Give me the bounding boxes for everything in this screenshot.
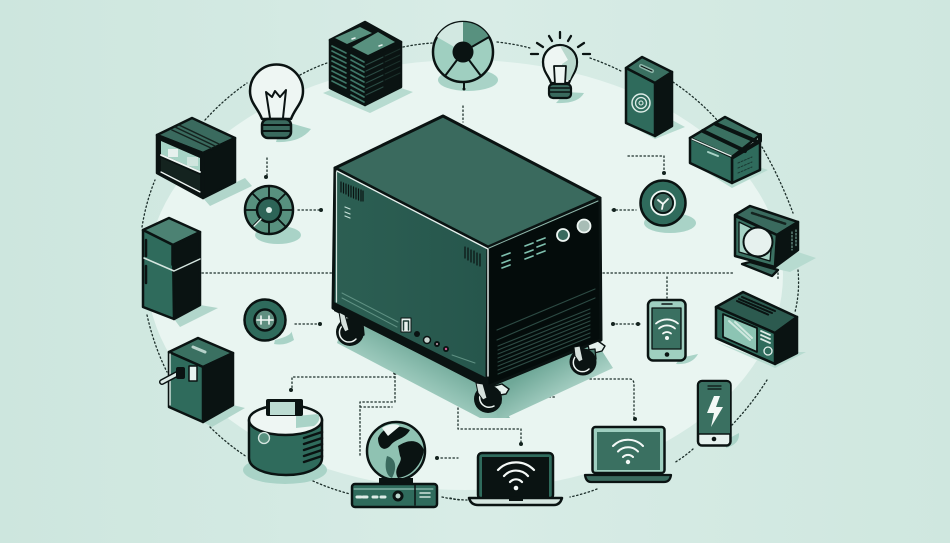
icon: box with plug xyxy=(162,338,245,427)
icon: flat box xyxy=(690,117,768,188)
front wheel xyxy=(474,383,509,413)
icon: cylinder device xyxy=(243,399,327,484)
dials xyxy=(557,220,590,241)
vents on left face xyxy=(341,182,480,266)
rear right wheel xyxy=(570,341,605,376)
icon: top disc xyxy=(433,22,498,91)
icon: refrigerator xyxy=(143,218,218,327)
left face xyxy=(333,168,488,387)
rear left wheel xyxy=(336,312,364,346)
right face grill xyxy=(497,289,595,374)
icon: tall box xyxy=(626,57,685,139)
bulb rays xyxy=(531,32,590,54)
dotted ring connecting the devices xyxy=(142,42,799,500)
icon: right light bulb with rays xyxy=(531,32,590,103)
lightning bolt xyxy=(707,396,723,427)
icon: globe on router xyxy=(352,422,437,507)
icon: black laptop with wifi xyxy=(469,453,562,505)
top face xyxy=(335,116,600,247)
icon: round switch button xyxy=(244,300,294,344)
dotted connector lines xyxy=(202,106,778,458)
icon: right dial xyxy=(640,180,696,233)
base strip xyxy=(334,302,487,388)
floor shadow left xyxy=(337,318,510,418)
small white dashes xyxy=(345,207,350,218)
icon: left wheel dial xyxy=(245,186,301,244)
floor shadow right xyxy=(487,340,613,418)
icon: monitor xyxy=(735,206,816,276)
icon: green laptop with wifi xyxy=(585,427,671,482)
central light ellipse xyxy=(147,60,783,490)
right face vents xyxy=(502,238,545,268)
icon: server stack xyxy=(323,22,413,113)
right face xyxy=(487,198,601,387)
rack lines xyxy=(332,46,364,102)
icon: smartphone with lightning bolt xyxy=(698,381,739,448)
icon: microwave xyxy=(716,292,806,368)
brand badge xyxy=(401,318,411,332)
edge highlights xyxy=(337,171,488,376)
icon: smartphone with wifi xyxy=(648,300,698,364)
icon: large light bulb xyxy=(250,64,311,142)
main power station unit xyxy=(333,116,613,418)
control dots xyxy=(414,331,449,352)
connector end dots xyxy=(264,171,666,460)
panel lines xyxy=(342,293,475,363)
icon: open rack cabinet xyxy=(157,118,252,206)
